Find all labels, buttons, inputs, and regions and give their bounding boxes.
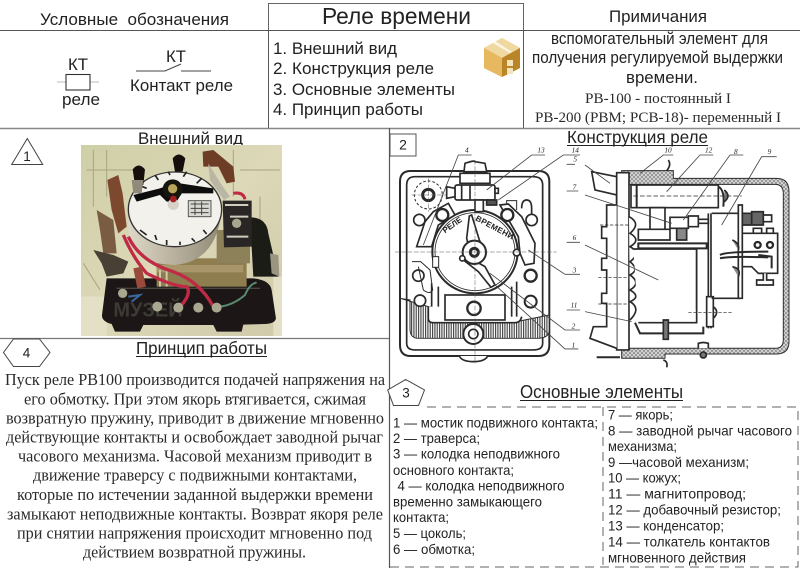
notes relay types: [535, 91, 781, 126]
notes description: времени.: [626, 69, 698, 87]
title: Реле времени: [322, 3, 471, 29]
list: parts 7 to 14: 14 — толкатель контактов: [608, 534, 770, 550]
text: operating principle description: замыкают неподвижные контакты. Возврат якоря реле: [7, 504, 383, 523]
leader lines and part numbers: 11: [571, 301, 577, 310]
list: parts 1 to 6: 1 — мостик подвижного контакта;: [393, 416, 598, 430]
list: parts 1 to 6: 5 — цоколь;: [393, 526, 466, 541]
leader lines and part numbers: 14: [572, 146, 579, 155]
leader lines and part numbers: 5: [573, 155, 577, 164]
list: parts 1 to 6: 6 — обмотка;: [393, 542, 475, 557]
text: operating principle description: действием возвратной пружины.: [83, 543, 306, 562]
leader lines and part numbers: 12: [705, 146, 713, 155]
list: parts 7 to 14: мгновенного действия: [608, 550, 746, 566]
contents list: [273, 40, 455, 119]
leader lines and part numbers: 9: [768, 147, 772, 156]
leader lines and part numbers: 13: [537, 146, 545, 155]
text: operating principle description: возвратную пружину, приводит в движение мгновенно: [6, 408, 384, 427]
panel: construction: [390, 127, 789, 367]
heading: construction: Конструкция реле: [567, 127, 708, 147]
heading: symbols legend: Условные обозначения: [40, 11, 229, 29]
notes description: вспомогательный элемент для: [551, 30, 768, 48]
list: parts 7 to 14: 13 — конденсатор;: [608, 518, 724, 534]
list: parts 7 to 14: механизма;: [608, 439, 677, 454]
symbol: relay contact: КТ: [166, 47, 186, 66]
icon: cardboard box: [484, 38, 520, 77]
symbol: relay contact: Контакт реле: [130, 77, 233, 95]
panel: title and contents: [273, 3, 520, 119]
list: parts 7 to 14: 11 — магнитопровод;: [608, 486, 746, 502]
heading: main elements: Основные элементы: [520, 381, 683, 402]
badge: number 2 square: 2: [399, 136, 407, 152]
list: parts 1 to 6: 4 — колодка неподвижного: [398, 478, 565, 494]
leader lines and part numbers: 4: [465, 146, 469, 155]
photo of the relay: [81, 145, 282, 336]
leader lines and part numbers: 10: [664, 146, 672, 155]
text: operating principle description: которые по истечении заданной выдержки времени: [17, 485, 373, 504]
photo of the relay: МУЗЕЙ: [113, 298, 183, 322]
list: parts 1 to 6: основного контакта;: [393, 463, 514, 478]
list: parts 1 to 6: контакта;: [393, 510, 449, 525]
list: parts 7 to 14: 9 —часовой механизм;: [608, 455, 749, 470]
panel: operating principle: [4, 338, 386, 562]
text: operating principle description: при снятии напряжения происходит мгновенно под: [17, 523, 373, 542]
badge: number 4 hexagon: 4: [23, 346, 31, 360]
contents list: 4. Принцип работы: [273, 101, 423, 119]
contents list: 2. Конструкция реле: [273, 60, 434, 78]
diagram: front view of relay: [395, 146, 580, 363]
list: parts 7 to 14: 8 — заводной рычаг часового: [608, 424, 792, 438]
list: parts 7 to 14: 12 — добавочный резистор;: [608, 502, 781, 518]
heading: external view: Внешний вид: [138, 129, 243, 148]
list: parts 1 to 6: 3 — колодка неподвижного: [393, 446, 560, 462]
notes relay types: РВ-100 - постоянный I: [585, 91, 731, 107]
badge: number 3 pentagon: 3: [402, 386, 410, 400]
list: parts 1 to 6: временно замыкающего: [393, 494, 542, 510]
badge: number 4 hexagon: [4, 339, 50, 366]
list: parts 7 to 14: 10 — кожух;: [608, 470, 681, 486]
panel: external view: [12, 129, 282, 336]
dial inscription: РЕЛЕ: [441, 215, 464, 235]
leader lines and part numbers: [585, 146, 777, 322]
symbol: relay contact: [130, 47, 233, 95]
panel: symbols legend: [40, 11, 233, 109]
badge: number 1 triangle: [12, 138, 43, 164]
heading: operating principle: Принцип работы: [136, 338, 267, 358]
list: parts 7 to 14: [608, 408, 792, 566]
text: operating principle description: [5, 370, 386, 562]
text: operating principle description: часового механизма. Часовой механизм приводит в: [18, 447, 372, 466]
leader lines and part numbers: 6: [573, 233, 577, 242]
leader lines and part numbers: 2: [572, 321, 576, 330]
heading: notes: Примичания: [609, 8, 707, 26]
badge: number 2 square: [390, 134, 416, 156]
panel: notes: [532, 8, 783, 126]
dashed list frame: [389, 407, 798, 567]
diagram: side section of relay: [585, 146, 789, 367]
contents list: 3. Основные элементы: [273, 81, 455, 99]
list: parts 7 to 14: 7 — якорь;: [608, 408, 673, 422]
text: operating principle description: движение траверсу с подвижными контактами,: [33, 466, 357, 485]
symbol: relay coil: КТ: [68, 55, 88, 74]
diagram: front view of relay: ВРЕМЕНИ: [474, 214, 515, 241]
text: operating principle description: его обмотку. При этом якорь втягивается, сжимая: [24, 389, 366, 408]
leader lines and part numbers: 1: [572, 340, 575, 349]
list: parts 1 to 6: [393, 416, 598, 557]
notes relay types: РВ-200 (РВМ; РСВ-18)- переменный I: [535, 110, 781, 126]
notes description: [532, 30, 783, 87]
leader lines and part numbers: 8: [734, 147, 738, 156]
notes description: получения регулируемой выдержки: [532, 49, 783, 67]
text: operating principle description: действующие контакты и освобождает заводной рычаг: [6, 427, 383, 446]
leader lines and part numbers: 3: [572, 266, 577, 275]
symbol: relay coil: реле: [62, 90, 100, 109]
leader lines and part numbers: 7: [573, 182, 577, 191]
leader lines and part numbers: [423, 146, 580, 349]
badge: number 3 pentagon: [388, 380, 424, 406]
symbol: relay coil: [57, 55, 100, 109]
panel: main elements: [388, 380, 798, 567]
list: parts 1 to 6: 2 — траверса;: [393, 431, 480, 446]
badge: number 1 triangle: 1: [23, 149, 31, 164]
contents list: 1. Внешний вид: [273, 40, 397, 58]
text: operating principle description: Пуск реле РВ100 производится подачей напряжения на: [5, 370, 386, 389]
